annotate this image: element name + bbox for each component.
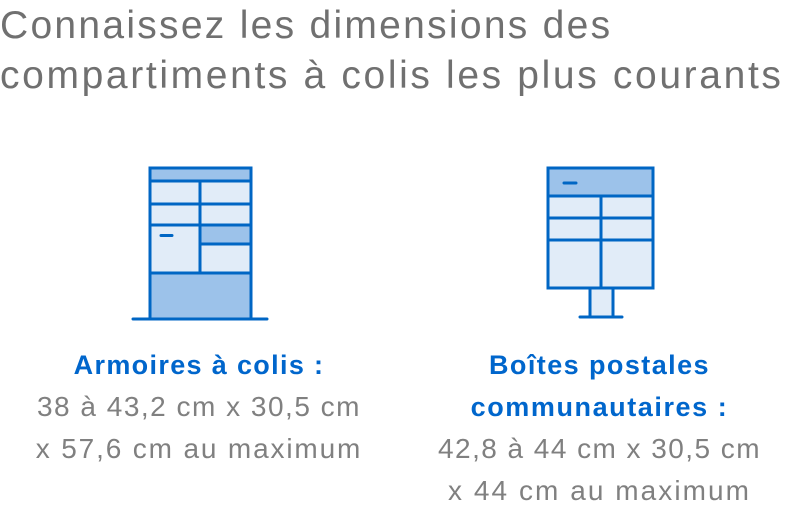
icon: community mailbox [546, 166, 654, 318]
text block: parcel cabinets: x 57,6 cm au maximum [36, 433, 362, 464]
title [0, 4, 784, 97]
text block: parcel cabinets: Armoires à colis : [74, 350, 324, 380]
text block: parcel cabinets [36, 350, 362, 464]
text block: community mailboxes: Boîtes postales [489, 350, 710, 380]
text block: community mailboxes [438, 350, 761, 506]
title: compartiments à colis les plus courants [0, 54, 784, 97]
text block: community mailboxes: communautaires : [471, 392, 728, 422]
text block: community mailboxes: x 44 cm au maximum [448, 475, 751, 506]
text block: parcel cabinets: 38 à 43,2 cm x 30,5 cm [37, 391, 361, 422]
title: Connaissez les dimensions des [0, 4, 612, 47]
text block: community mailboxes: 42,8 à 44 cm x 30,5 cm [438, 433, 761, 464]
icon: parcel locker cabinet [132, 166, 268, 320]
